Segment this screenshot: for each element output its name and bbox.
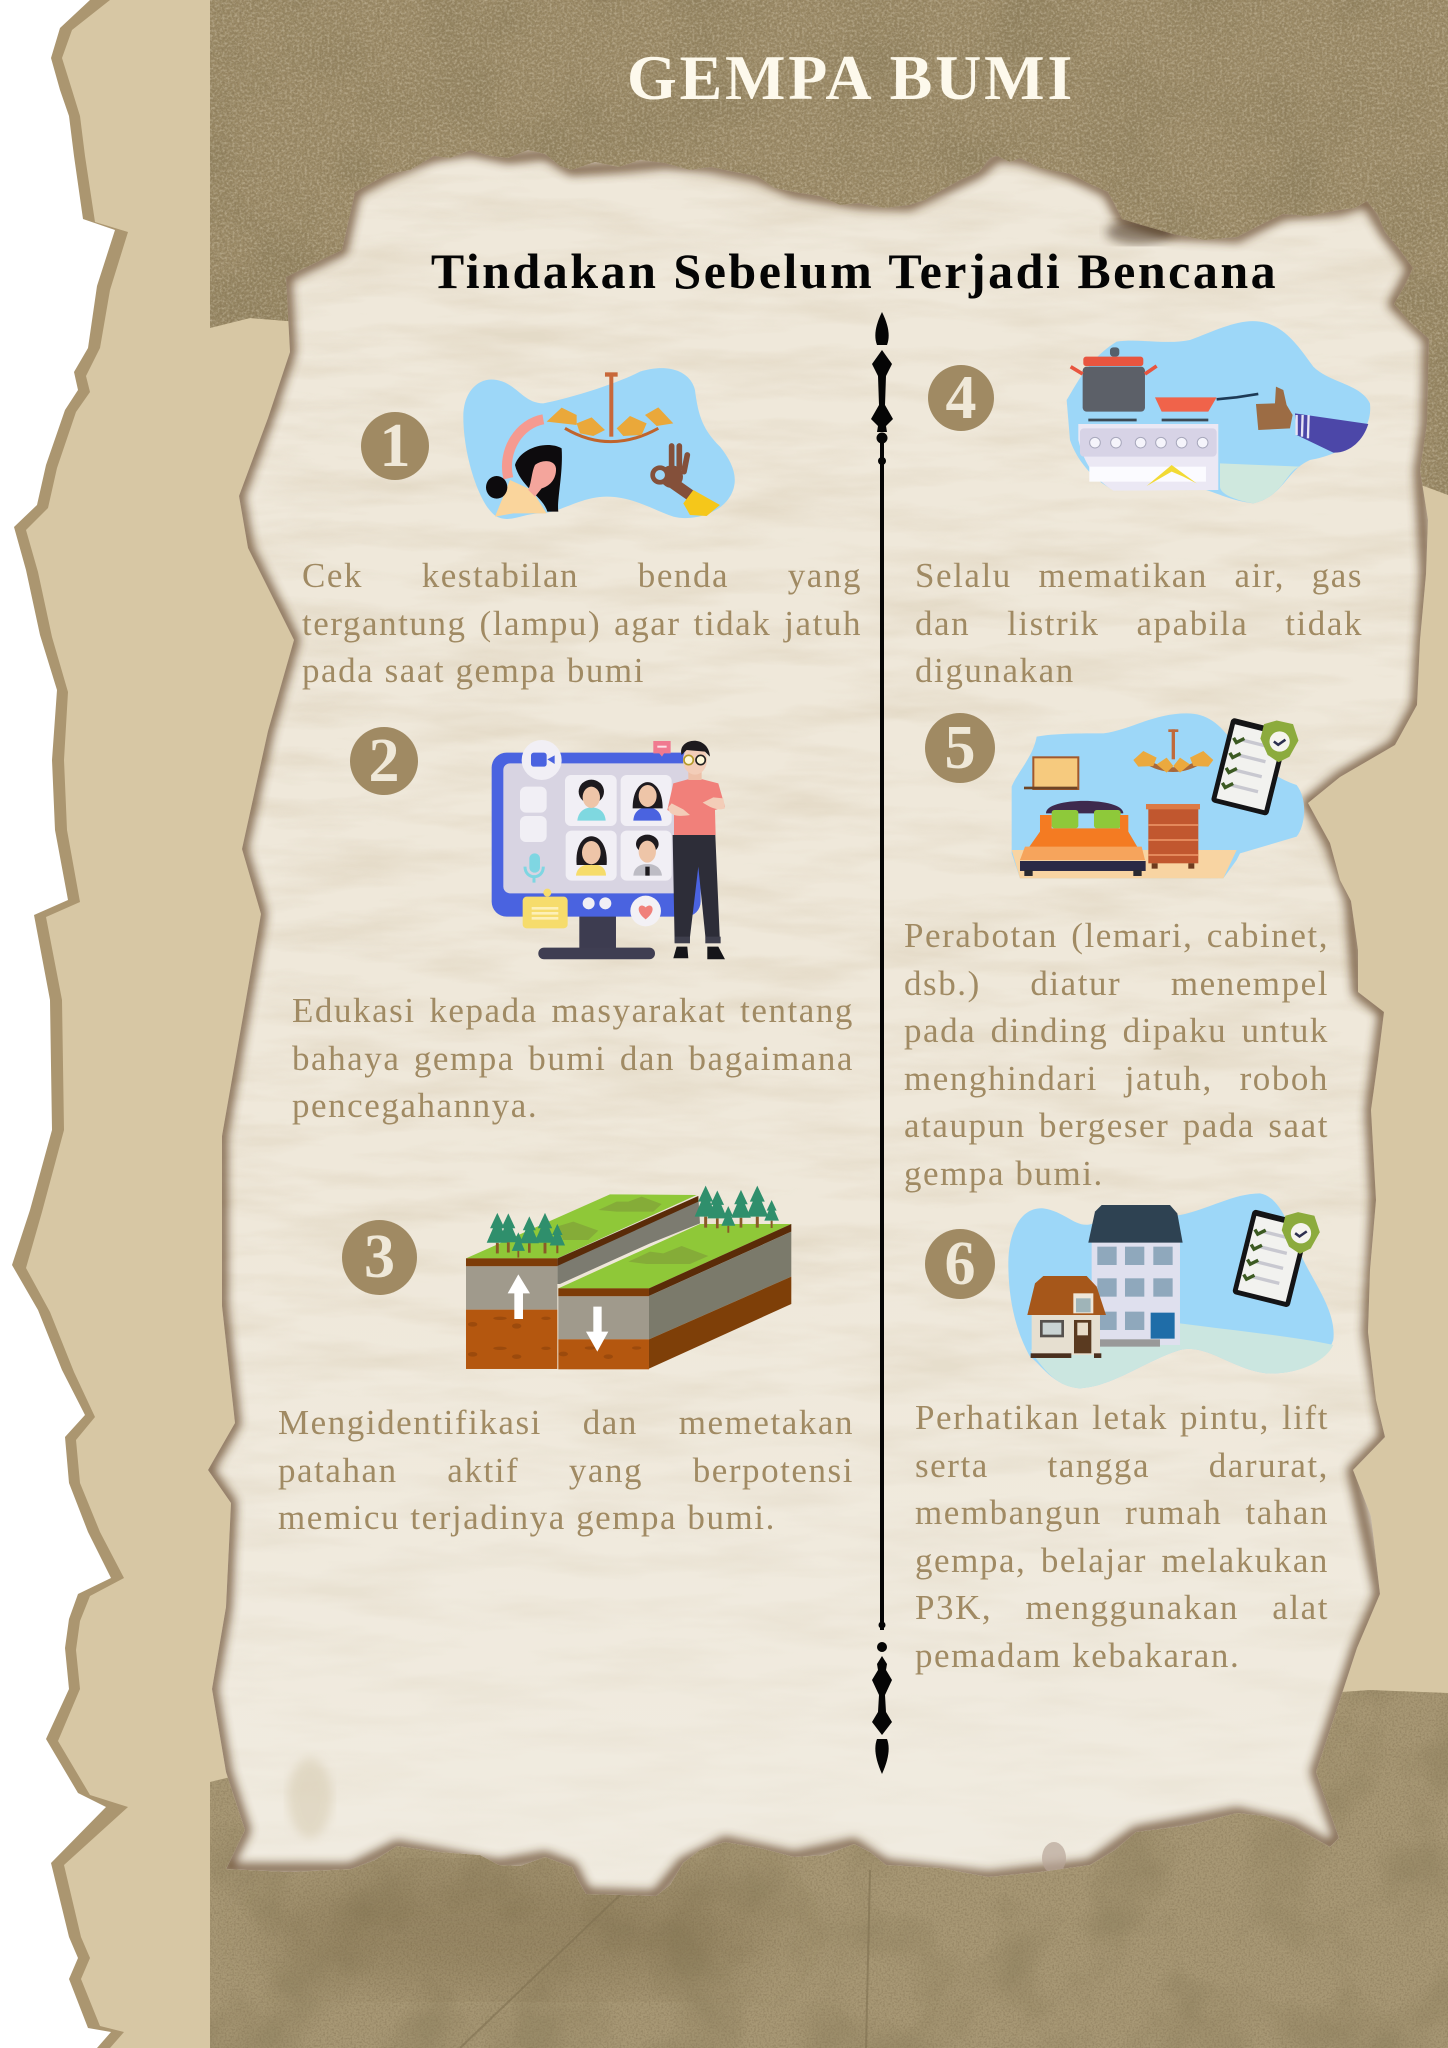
number badge 4 [928,365,994,431]
text block: step 6: pemadam kebakaran. [915,1636,1240,1674]
text block: step 5 [904,916,1329,1192]
text block: step 2: bahaya gempa bumi dan bagaimana [292,1038,854,1078]
number badge 3 [342,1220,417,1295]
text block: step 4 [915,556,1363,690]
text block: step 4: Selalu mematikan air, gas [915,556,1363,595]
icon: chandelier check illustration [463,368,735,519]
number badge 6: 6 [944,1230,976,1298]
text block: step 2: Edukasi kepada masyarakat tentang [292,991,854,1030]
number badge 3: 3 [364,1223,395,1291]
panel: cardboard bottom [210,1680,1448,2048]
ornamental vertical divider [871,312,893,1774]
text block: step 5: ataupun bergeser pada saat [904,1106,1329,1145]
panel: cardboard top [210,0,1448,500]
text block: step 3: memicu terjadinya gempa bumi. [278,1498,776,1537]
torn left strip shadow [12,0,230,2048]
text block: step 6: P3K, menggunakan alat [915,1588,1329,1627]
text block: step 2: pencegahannya. [292,1086,538,1125]
icon: bedroom furniture illustration [1012,713,1304,878]
text block: step 3 [278,1403,854,1537]
number badge 2 [350,727,418,795]
text block: step 5: dsb.) diatur menempel [904,964,1329,1002]
number badge 1: 1 [380,412,410,480]
number badge 2: 2 [368,727,400,795]
text block: step 5: pada dinding dipaku untuk [904,1011,1329,1050]
text block: step 3: patahan aktif yang berpotensi [278,1450,854,1490]
number badge 5: 5 [944,714,976,782]
heading: Tindakan Sebelum Terjadi Bencana [431,243,1278,299]
text block: step 6: Perhatikan letak pintu, lift [915,1398,1329,1437]
text block: step 5: gempa bumi. [904,1154,1104,1192]
text block: step 5: Perabotan (lemari, cabinet, [904,916,1329,955]
text block: step 6: membangun rumah tahan [915,1493,1329,1532]
number badge 4: 4 [946,364,976,432]
number badge 6 [925,1229,995,1299]
text block: step 6 [915,1398,1329,1674]
text block: step 4: digunakan [915,651,1075,690]
text block: step 6: serta tangga darurat, [915,1446,1329,1484]
icon: online education illustration [492,740,725,959]
panel: burnt parchment [200,140,1440,1910]
text block: step 5: menghindari jatuh, roboh [904,1058,1329,1098]
text block: step 6: gempa, belajar melakukan [915,1540,1329,1580]
icon: stove and turning off gas illustration [1067,321,1370,503]
icon: houses and safety illustration [1008,1193,1334,1388]
text block: step 1: tergantung (lampu) agar tidak jatuh [302,604,862,642]
text block: step 1: Cek kestabilan benda yang [302,556,862,595]
text block: step 4: dan listrik apabila tidak [915,604,1363,642]
text block: step 1 [302,556,862,690]
number badge 5 [925,713,995,783]
icon: fault block diagram [466,1186,791,1369]
number badge 1 [361,412,429,480]
title: GEMPA BUMI [627,42,1075,113]
text block: step 3: Mengidentifikasi dan memetakan [278,1403,854,1442]
text block: step 1: pada saat gempa bumi [302,651,645,690]
text block: step 2 [292,991,854,1125]
